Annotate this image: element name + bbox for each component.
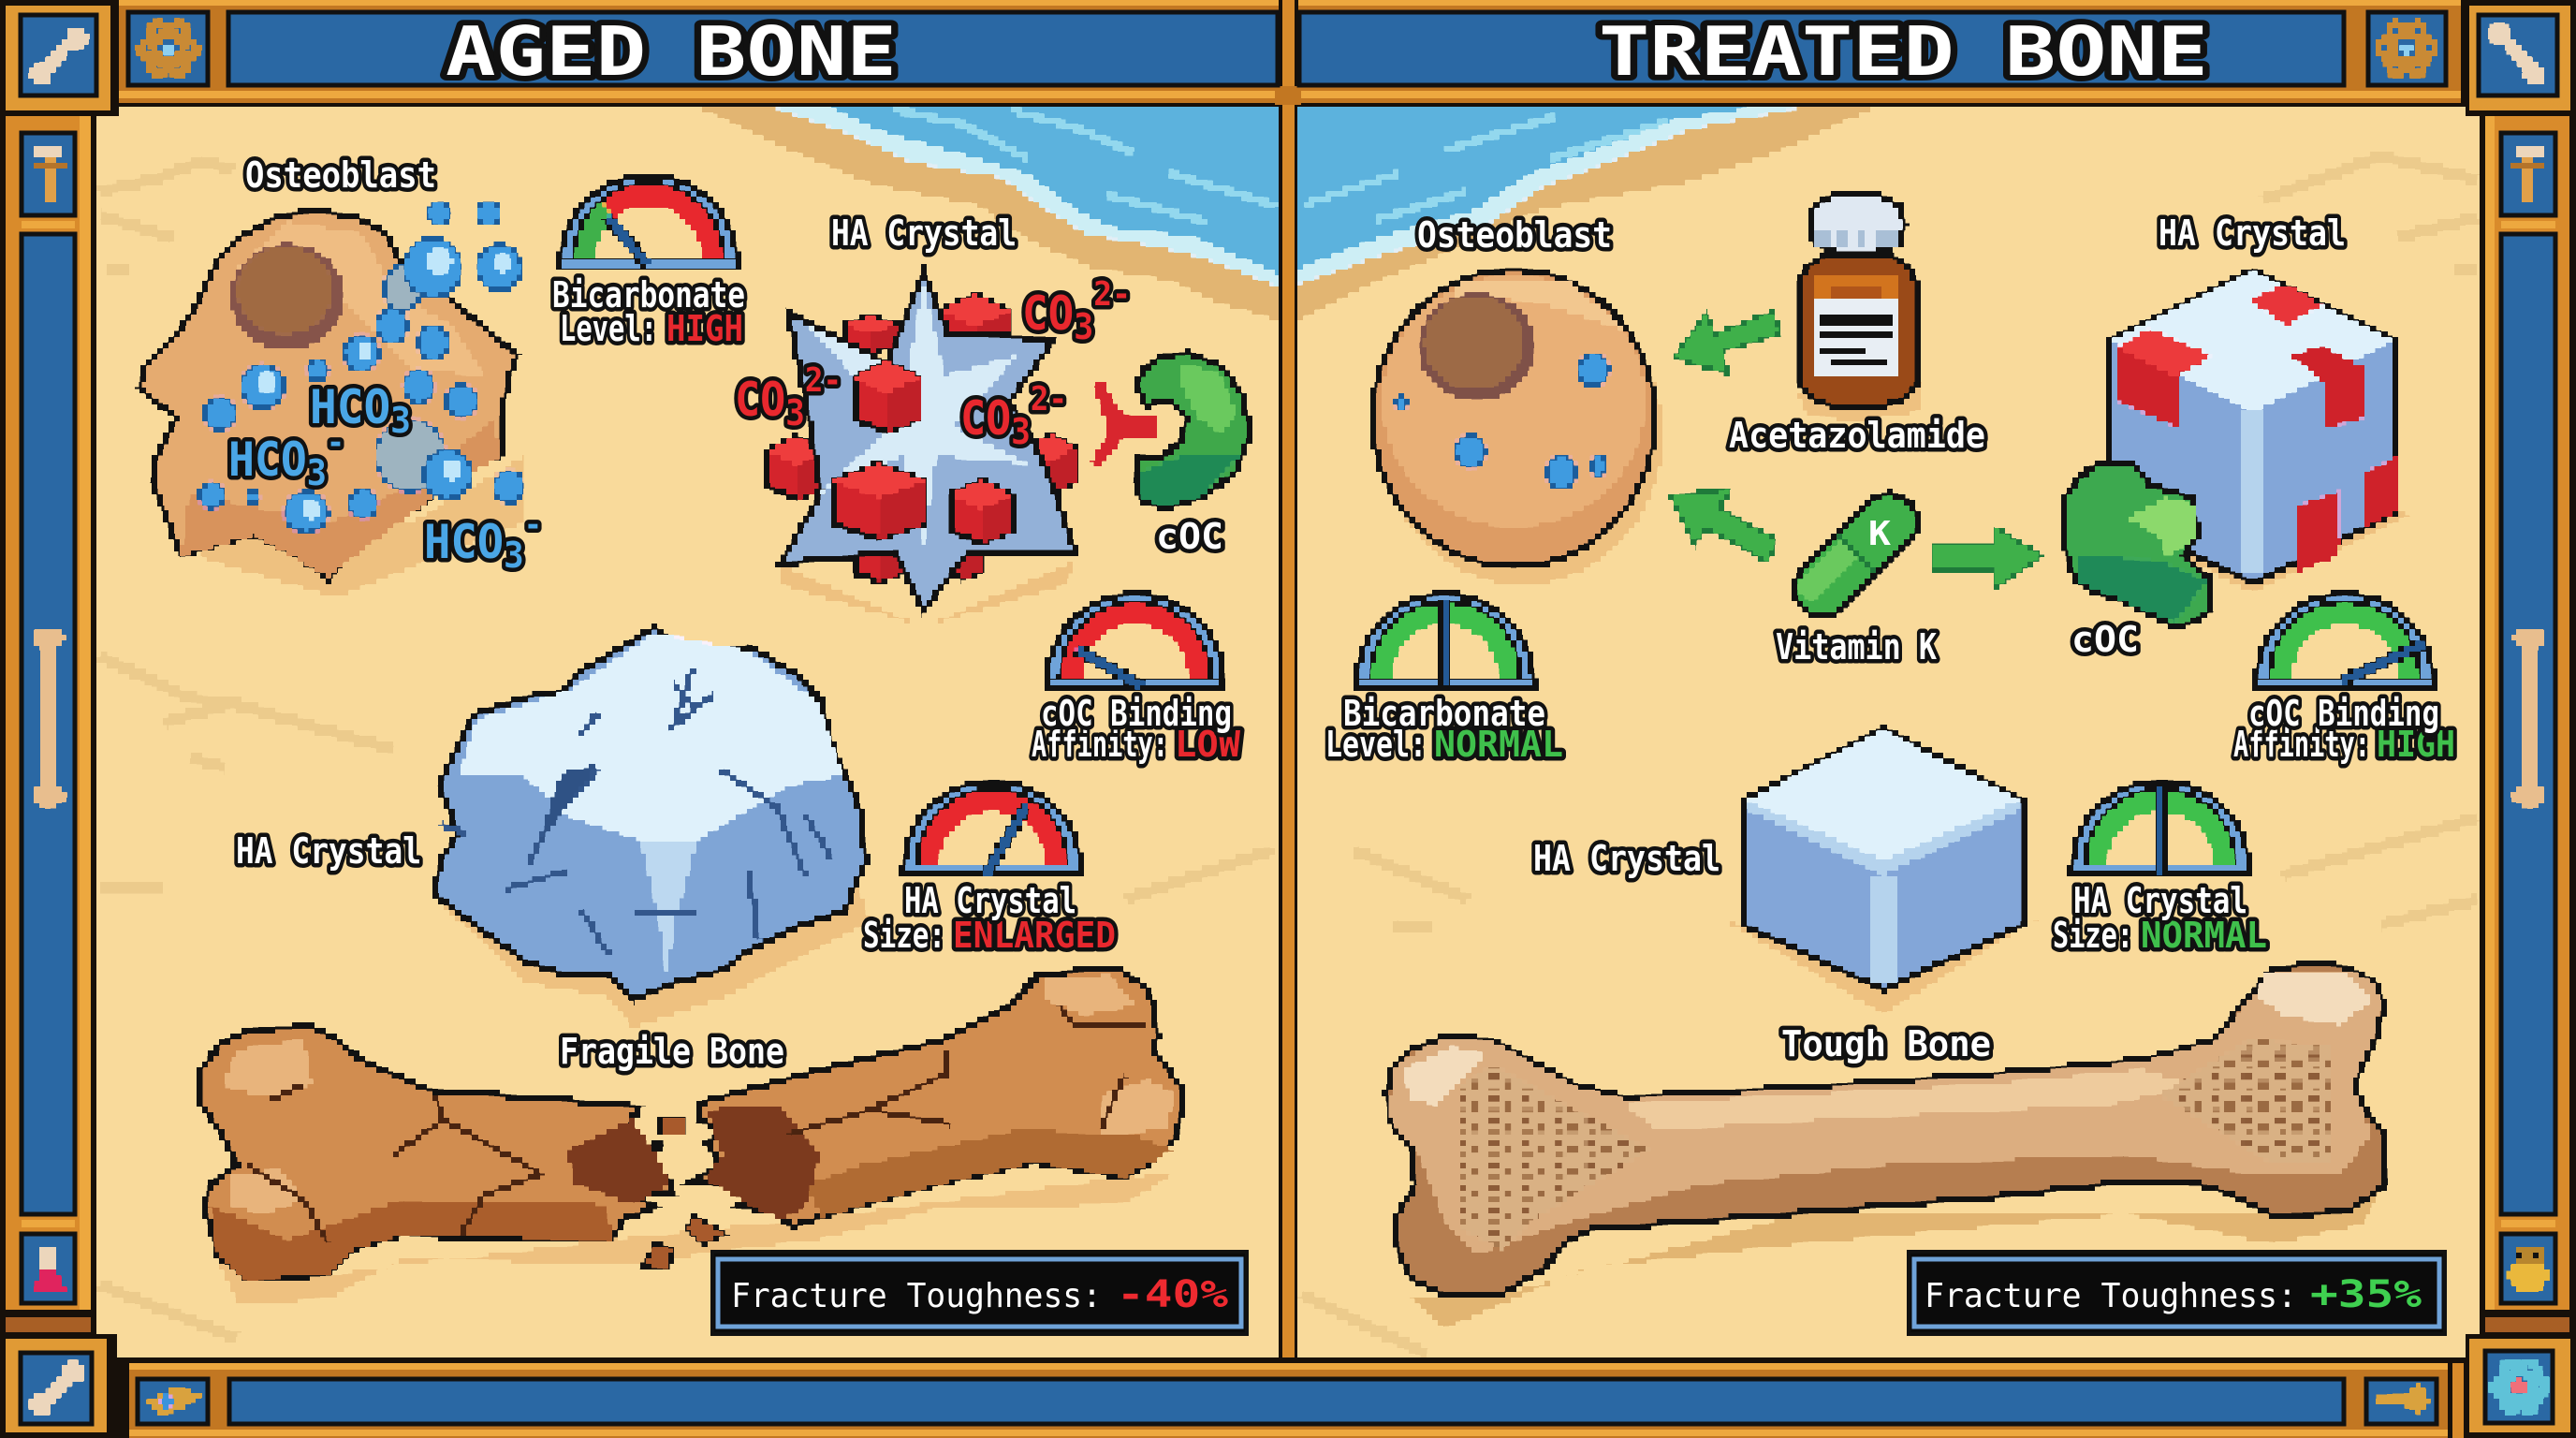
- water: [1296, 108, 1755, 270]
- labels aged: 3: [1011, 411, 1031, 452]
- labels treated: Acetazolamide: [1729, 415, 1985, 456]
- labels aged: Level:: [560, 308, 657, 349]
- title: treated bone: TREATED BONE: [1599, 12, 2208, 91]
- spiky HA crystal with carbonate cubes: [768, 271, 1076, 627]
- labels treated: Osteoblast: [1417, 214, 1612, 256]
- labels treated: K: [1868, 515, 1891, 553]
- icon: atom top-left: [140, 18, 197, 80]
- fracture toughness aged: Fracture Toughness:: [731, 1277, 1102, 1315]
- bicarbonate bubbles: [199, 201, 524, 532]
- labels treated: HA Crystal: [2159, 213, 2346, 254]
- fracture toughness treated: Fracture Toughness:: [1925, 1277, 2297, 1315]
- foam: [1296, 108, 1801, 285]
- icon: owl charm: [2507, 1245, 2552, 1292]
- gauge: HA crystal size enlarged: [900, 778, 1084, 877]
- labels treated: HA Crystal: [2073, 880, 2247, 921]
- labels aged: cOC: [1156, 516, 1223, 557]
- labels aged: CO: [735, 373, 791, 427]
- vitamin K pill: [1783, 482, 1929, 628]
- cOC treated: [2064, 464, 2212, 627]
- labels treated: Vitamin K: [1776, 626, 1937, 668]
- icon: bone bottom-left: [30, 1361, 84, 1416]
- labels aged: Affinity:: [1032, 724, 1168, 765]
- labels aged: HA Crystal: [236, 830, 421, 872]
- treated bone artwork: [1296, 108, 2480, 1357]
- fracture toughness aged: [712, 1252, 1247, 1334]
- labels aged: HCO: [424, 515, 508, 569]
- labels treated: Size:: [2053, 915, 2133, 956]
- title: aged bone: AGED BONE: [446, 12, 897, 91]
- osteoblast aged: [139, 201, 525, 597]
- labels aged: 3: [390, 400, 411, 441]
- panel: aged bone: [96, 108, 1280, 1357]
- frame: bottom bar: [96, 1357, 2479, 1438]
- gauge: HA crystal size normal: [2069, 778, 2252, 877]
- labels aged: [228, 154, 1240, 1072]
- labels treated: HA Crystal: [1533, 838, 1720, 879]
- labels aged: -: [524, 506, 542, 544]
- labels aged: HA Crystal: [831, 213, 1017, 254]
- labels treated: HIGH: [2377, 724, 2455, 765]
- labels treated: NORMAL: [2141, 915, 2267, 956]
- cOC aged with broken fragment: [1090, 353, 1250, 507]
- wet sand: [1296, 108, 1875, 322]
- aged bone artwork: [96, 108, 1280, 1357]
- labels aged: Size:: [863, 915, 945, 956]
- labels treated: cOC: [2071, 619, 2139, 660]
- HA crystal cube with carbonate: [2100, 270, 2413, 594]
- labels aged: cOC Binding: [1041, 693, 1232, 734]
- acetazolamide bottle: [1797, 194, 1924, 421]
- labels treated: Tough Bone: [1781, 1023, 1991, 1064]
- gauge: cOC binding high: [2253, 591, 2437, 690]
- labels aged: 2-: [1031, 380, 1067, 418]
- icon: fish bottom-left: [148, 1387, 204, 1416]
- wet sand: [698, 108, 1280, 321]
- fracture toughness aged: -40%: [1117, 1273, 1228, 1316]
- labels aged: HCO: [228, 433, 313, 487]
- normal HA crystal: [1723, 727, 2043, 1015]
- labels aged: -: [327, 424, 344, 462]
- fracture toughness treated: [1909, 1252, 2445, 1334]
- icon: bone top-left: [30, 26, 88, 86]
- labels treated: Affinity:: [2233, 724, 2370, 765]
- labels treated: cOC Binding: [2248, 693, 2439, 734]
- labels aged: HIGH: [666, 308, 743, 349]
- icon: femur rail left: [32, 145, 66, 201]
- foam: [774, 108, 1280, 287]
- labels aged: CO: [960, 391, 1017, 446]
- icon: fish bottom-right: [2374, 1384, 2430, 1414]
- fracture toughness treated: +35%: [2310, 1273, 2422, 1316]
- icon: long bone rail left: [32, 627, 66, 807]
- tough bone: [1386, 962, 2387, 1329]
- icon: bone top-right: [2488, 22, 2546, 86]
- labels aged: Fragile Bone: [560, 1031, 784, 1072]
- water: [829, 108, 1280, 274]
- spongy bone: [1460, 1064, 1649, 1250]
- icon: flask: [32, 1245, 67, 1294]
- labels aged: Bicarbonate: [552, 274, 745, 315]
- icon: femur rail right: [2512, 145, 2546, 201]
- labels aged: 3: [1074, 306, 1093, 347]
- labels treated: Level:: [1325, 724, 1427, 765]
- fragile broken bone: [201, 967, 1182, 1304]
- nucleus: [230, 243, 344, 350]
- icon: atom top-right: [2378, 18, 2435, 80]
- gauge: cOC binding low: [1044, 591, 1227, 690]
- labels aged: HA Crystal: [904, 880, 1076, 921]
- icon: atom bottom-right: [2494, 1357, 2546, 1416]
- labels aged: 3: [307, 452, 327, 493]
- cracked enlarged HA crystal: [435, 627, 871, 1028]
- labels aged: CO: [1022, 286, 1078, 341]
- labels aged: 3: [785, 392, 805, 433]
- labels aged: 2-: [805, 361, 842, 400]
- labels aged: 3: [504, 535, 524, 576]
- frame: right rail: [2480, 108, 2576, 1438]
- labels treated: Bicarbonate: [1343, 693, 1545, 734]
- labels aged: LOW: [1175, 724, 1240, 765]
- icon: long bone rail right: [2512, 627, 2546, 807]
- labels aged: HCO: [310, 380, 394, 434]
- osteoblast treated: [1372, 270, 1663, 585]
- labels treated: NORMAL: [1434, 724, 1563, 765]
- labels aged: Osteoblast: [245, 154, 436, 196]
- bone fragments: [640, 1117, 726, 1269]
- frame: left rail: [0, 108, 96, 1438]
- arrows green: [1670, 312, 2043, 589]
- labels aged: 2-: [1093, 275, 1131, 314]
- gauge: bicarbonate high: [557, 172, 740, 271]
- gauge: bicarbonate normal: [1354, 591, 1537, 690]
- labels aged: ENLARGED: [953, 915, 1116, 956]
- labels treated: [1325, 213, 2455, 1064]
